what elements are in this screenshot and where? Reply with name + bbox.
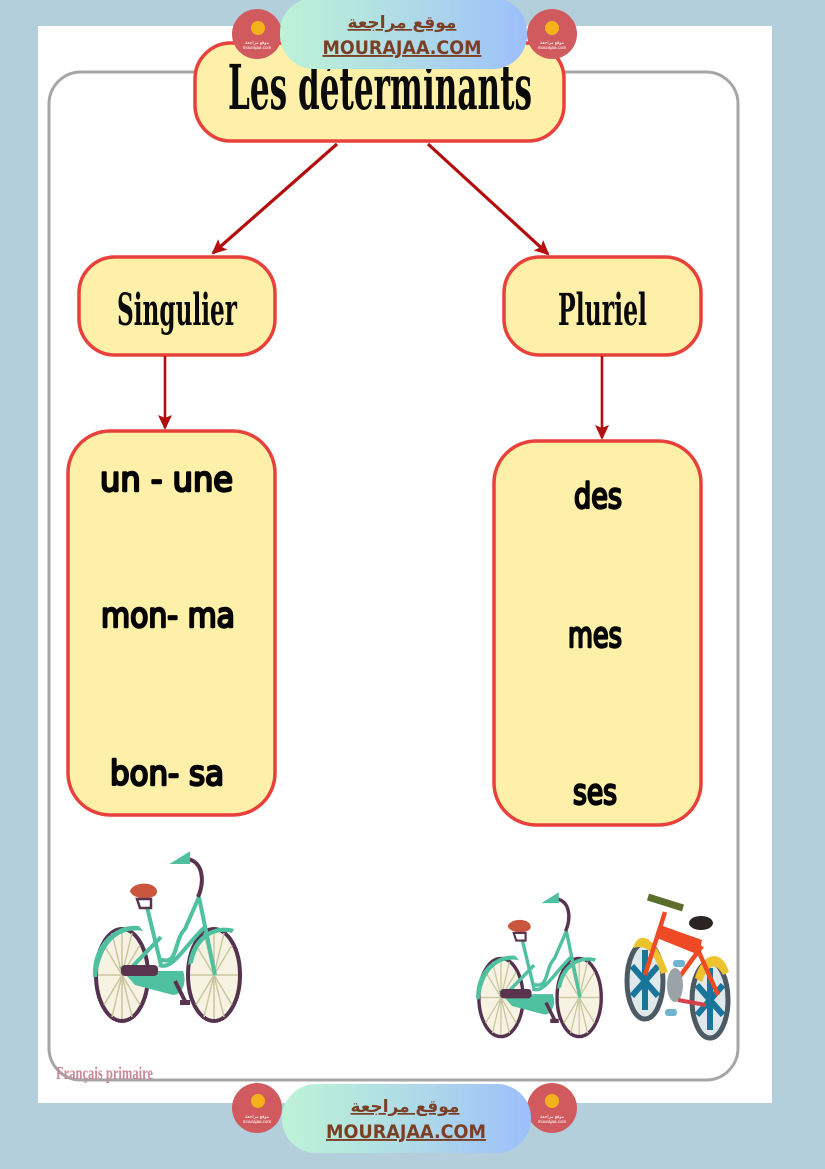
badge: left bottom: mourajaa.com: [243, 1119, 272, 1124]
badge: right bottom: موقع مراجعة: [540, 1114, 565, 1120]
heading box: Pluriel: [504, 257, 701, 355]
badge: right top: mourajaa.com: [538, 45, 567, 50]
arabic site label bottom: موقع مراجعة: [351, 1097, 459, 1117]
badge: left top: موقع مراجعة: [245, 40, 270, 46]
panel: singular determiners: [68, 431, 275, 815]
text: des: des: [574, 477, 622, 517]
badge: right top: [527, 9, 577, 59]
text: bon- sa: bon- sa: [110, 754, 224, 794]
text: mon- ma: mon- ma: [101, 596, 235, 636]
heading: Pluriel: Pluriel: [558, 285, 647, 336]
site label bottom: MOURAJAA.COM: [326, 1121, 486, 1143]
heading: Singulier: Singulier: [117, 285, 237, 336]
text: mes: mes: [568, 616, 622, 656]
text: ses: ses: [573, 773, 617, 813]
outer gray rounded frame: [49, 72, 738, 1080]
badge: left top: [232, 9, 282, 59]
icon: teal bicycle, singular: [93, 853, 240, 1021]
text: un - une: un - une: [100, 460, 233, 500]
arrow: singulier down: [164, 356, 166, 428]
bottom banner: [232, 1083, 577, 1153]
badge: left top: mourajaa.com: [243, 45, 272, 50]
top banner: [232, 0, 577, 69]
arabic site label top: موقع مراجعة: [348, 13, 456, 33]
site label top: MOURAJAA.COM: [322, 37, 482, 59]
icon: teal bicycle, plural: [476, 894, 601, 1037]
badge: left bottom: موقع مراجعة: [245, 1114, 270, 1120]
badge: right bottom: mourajaa.com: [538, 1119, 567, 1124]
arrow: title to pluriel: [428, 144, 548, 254]
icon: red bicycle: [627, 897, 729, 1038]
pill top: [280, 0, 527, 69]
title: Les déterminants: [228, 51, 532, 124]
title box: [195, 43, 564, 141]
badge: right top: موقع مراجعة: [540, 40, 565, 46]
watermark: Français primaire: Français primaire: [56, 1063, 153, 1083]
badge: left bottom: [232, 1083, 282, 1133]
badge: right bottom: [527, 1083, 577, 1133]
arrow: pluriel down: [601, 356, 603, 438]
panel: plural determiners: [494, 441, 701, 825]
pill bottom: [282, 1084, 531, 1153]
arrow: title to singulier: [213, 144, 337, 253]
heading box: Singulier: [79, 257, 275, 355]
